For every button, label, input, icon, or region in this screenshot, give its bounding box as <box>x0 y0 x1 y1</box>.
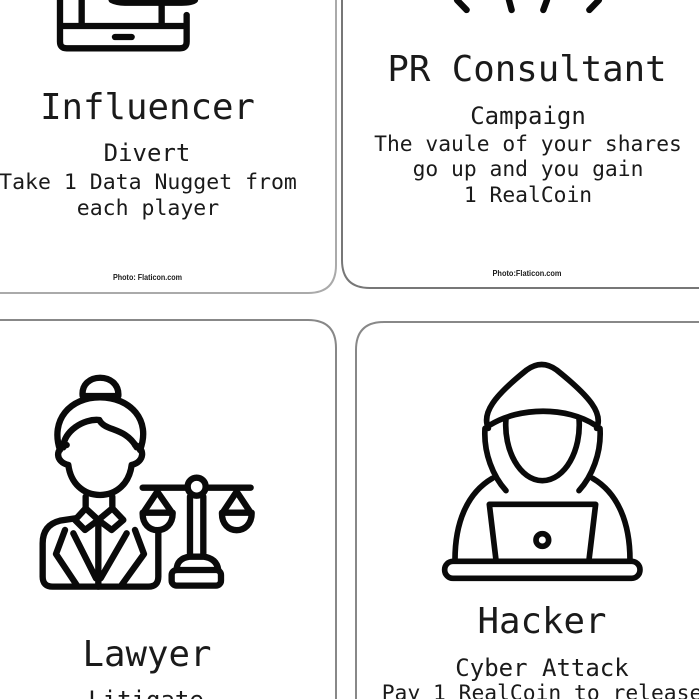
panel: lawyer card <box>0 320 336 699</box>
icon: PR consultant rays <box>457 0 599 10</box>
title: PR consultant: PR Consultant <box>387 49 667 90</box>
ability: PR consultant: go up and you gain <box>413 157 643 182</box>
title: lawyer: Lawyer <box>83 634 211 675</box>
photo credit: influencer: Photo: Flaticon.com <box>113 273 182 282</box>
panel: PR consultant card <box>342 0 699 288</box>
icon: hacker at laptop <box>445 364 640 578</box>
ability: PR consultant: 1 RealCoin <box>464 183 592 208</box>
ability: hacker: Cyber Attack <box>455 654 629 682</box>
icon: lawyer with scales <box>43 378 252 587</box>
ability: influencer: Divert <box>104 139 190 167</box>
ability: PR consultant <box>374 102 682 208</box>
ability: influencer <box>0 139 297 221</box>
ability: influencer: each player <box>77 196 219 221</box>
ability: hacker <box>382 654 699 699</box>
ability: influencer: Take 1 Data Nugget from <box>0 170 297 195</box>
ability: PR consultant: The vaule of your shares <box>374 132 682 157</box>
title: hacker: Hacker <box>478 601 606 642</box>
panel: hacker card <box>356 322 699 699</box>
panel: influencer card <box>0 0 336 293</box>
ability: PR consultant: Campaign <box>470 102 586 130</box>
photo credit: PR consultant: Photo:Flaticon.com <box>492 269 562 278</box>
title: influencer: Influencer <box>40 87 255 128</box>
icon: influencer tablet <box>60 0 195 48</box>
